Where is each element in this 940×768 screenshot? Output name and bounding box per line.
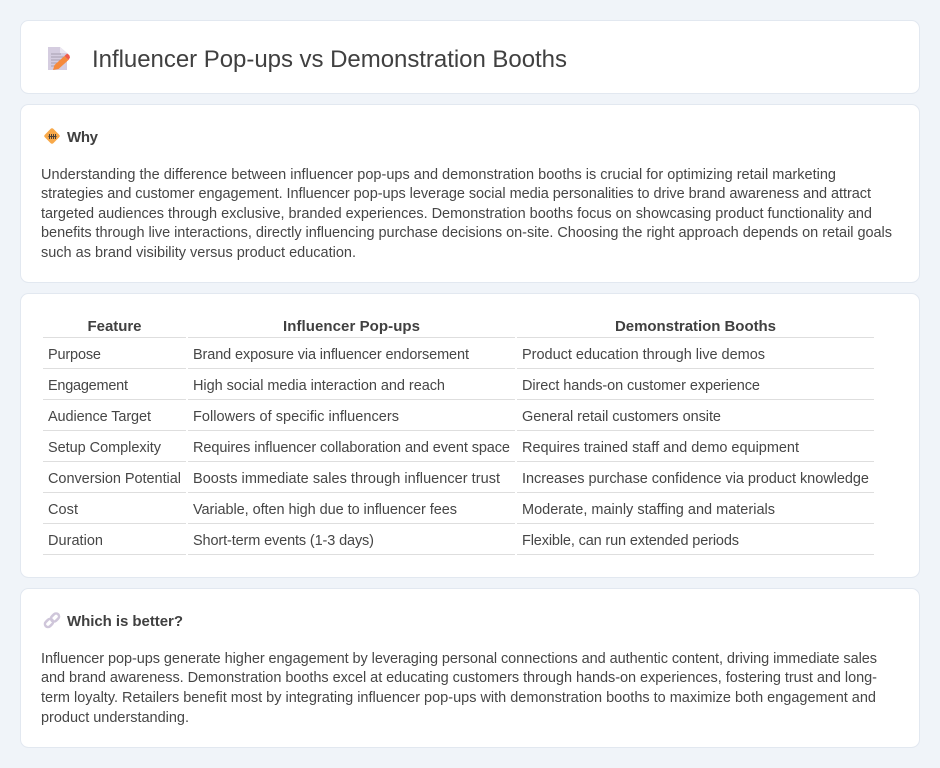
table row: setup complexity — [48, 440, 799, 456]
table row: audience target — [48, 409, 721, 425]
table row: audience target: General retail customers onsite — [522, 409, 721, 425]
table row: duration: Flexible, can run extended periods — [522, 533, 739, 549]
table row: audience target: Followers of specific influencers — [193, 409, 399, 425]
text block: recommendation: product understanding. — [41, 710, 189, 726]
text block: why explanation: strategies and customer engagement. Influencer pop-ups leverage social media personalities to drive brand awareness and attract — [41, 186, 871, 202]
text block: recommendation: Influencer pop-ups generate higher engagement by leveraging personal connections and authentic content, driving immediate sales — [41, 651, 877, 667]
table row: duration: Duration — [48, 533, 103, 549]
table row: cost: Moderate, mainly staffing and materials — [522, 502, 775, 518]
table row: cost — [48, 502, 775, 518]
table row: conversion potential: Conversion Potential — [48, 471, 181, 487]
table row: cost: Cost — [48, 502, 78, 518]
table row: cost: Variable, often high due to influencer fees — [193, 502, 457, 518]
table header: Influencer Pop-ups — [283, 318, 420, 335]
table row: engagement: High social media interaction and reach — [193, 378, 445, 394]
text block: why explanation: such as brand visibility versus product education. — [41, 245, 356, 261]
text block: why explanation: targeted audiences through exclusive, branded experiences. Demonstration booths focus on showcasing product functionality and — [41, 206, 872, 222]
table row: setup complexity: Setup Complexity — [48, 440, 162, 456]
table header — [88, 318, 776, 335]
panel: why — [20, 104, 920, 282]
heading: which is better: Which is better? — [67, 613, 183, 630]
table row: engagement: Direct hands-on customer experience — [522, 378, 760, 394]
text block: why explanation: benefits through live interactions, directly influencing purchase decisions on-site. Choosing the right approach depends on retail goals — [41, 225, 892, 241]
table row: duration: Short-term events (1-3 days) — [193, 533, 374, 549]
text block: recommendation: and brand awareness. Demonstration booths excel at educating customers through hands-on experiences, fostering trust and long- — [41, 670, 877, 686]
icon: link — [44, 612, 60, 628]
panel: title header — [20, 20, 920, 94]
heading: why: Why — [67, 129, 99, 146]
table row: purpose: Brand exposure via influencer endorsement — [193, 347, 469, 363]
table row: setup complexity: Requires trained staff and demo equipment — [522, 440, 799, 456]
table row: duration — [48, 533, 739, 549]
panel: which is better — [20, 588, 920, 748]
icon: orange diamond sign — [44, 128, 60, 144]
table row: engagement: Engagement — [48, 378, 128, 394]
table row: audience target: Audience Target — [48, 409, 151, 425]
table row: engagement — [48, 378, 760, 394]
table row: conversion potential: Boosts immediate sales through influencer trust — [193, 471, 500, 487]
table row: conversion potential: Increases purchase confidence via product knowledge — [522, 471, 869, 487]
title: Influencer Pop-ups vs Demonstration Booths — [92, 46, 567, 73]
table row: purpose — [48, 347, 765, 363]
text block: why explanation: Understanding the difference between influencer pop-ups and demonstration booths is crucial for optimizing retail marketing — [41, 167, 836, 183]
icon: memo with pencil — [48, 47, 70, 70]
text block: why explanation — [41, 167, 892, 261]
table header: Demonstration Booths — [615, 318, 776, 335]
table row: setup complexity: Requires influencer collaboration and event space — [193, 440, 510, 456]
table row: purpose: Product education through live demos — [522, 347, 765, 363]
text block: recommendation: term loyalty. Retailers benefit most by integrating influencer pop-ups with demonstration booths to maximize both engagement and — [41, 690, 876, 706]
table header: Feature — [88, 318, 142, 335]
panel: comparison table — [20, 294, 920, 578]
text block: recommendation — [41, 651, 877, 726]
table row: purpose: Purpose — [48, 347, 101, 363]
table row: conversion potential — [48, 471, 869, 487]
